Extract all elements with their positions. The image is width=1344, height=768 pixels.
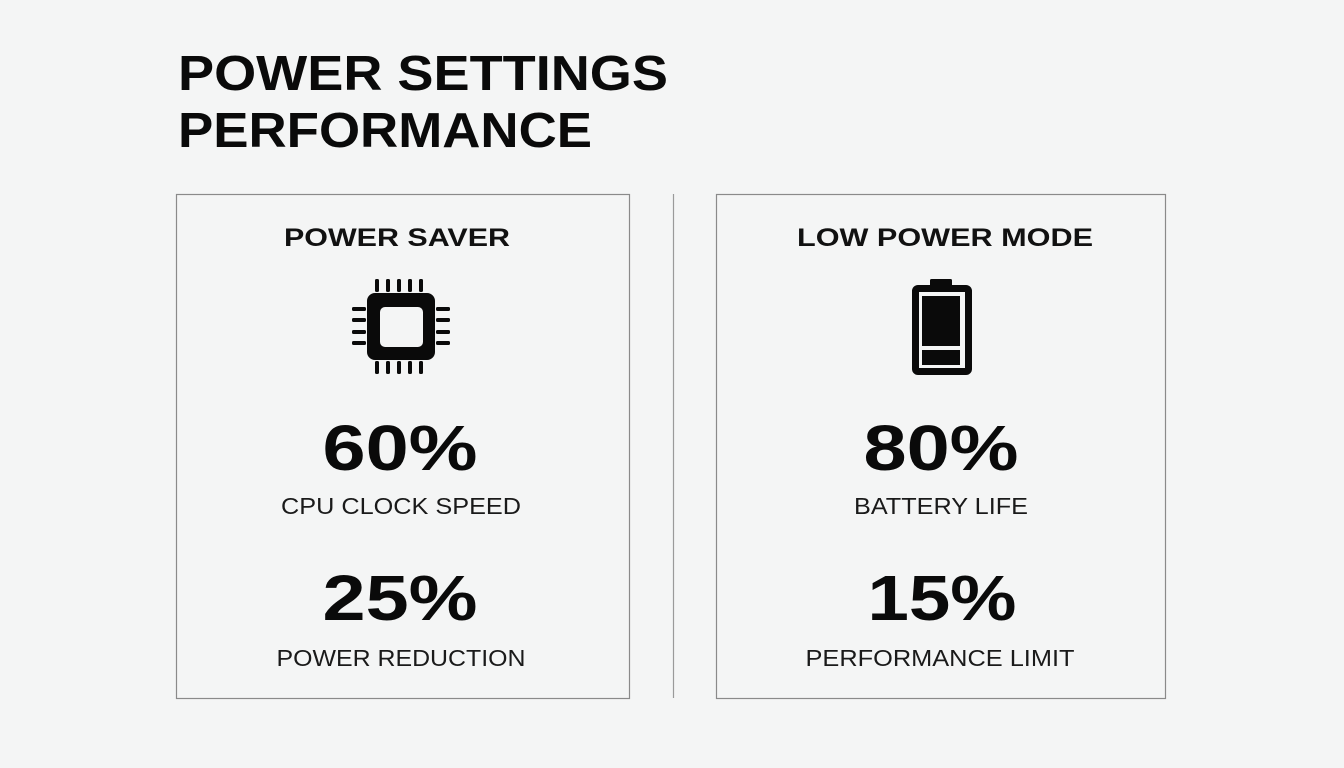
icon: battery (912, 279, 972, 375)
heading: low power mode: LOW POWER MODE (797, 224, 1093, 252)
panel: low power mode (716, 194, 1166, 698)
stat: 60% cpu clock speed: 60% (322, 412, 478, 484)
title (178, 47, 668, 158)
stat: 25% power reduction: POWER REDUCTION (276, 645, 526, 671)
stat: 80% battery life (854, 412, 1028, 519)
stat: 80% battery life: 80% (864, 412, 1018, 484)
panel: power saver (176, 194, 630, 698)
stat: 60% cpu clock speed (281, 412, 521, 519)
stat: 60% cpu clock speed: CPU CLOCK SPEED (281, 493, 521, 519)
icon: cpu chip (352, 279, 450, 374)
stat: 25% power reduction (276, 562, 526, 671)
stat: 25% power reduction: 25% (322, 562, 478, 634)
stat: 15% performance limit: PERFORMANCE LIMIT (806, 645, 1074, 671)
title: POWER SETTINGS (178, 47, 668, 101)
stat: 15% performance limit: 15% (868, 562, 1016, 634)
title: PERFORMANCE (178, 104, 592, 158)
stat: 80% battery life: BATTERY LIFE (854, 493, 1028, 519)
heading: power saver: POWER SAVER (284, 224, 510, 252)
stat: 15% performance limit (806, 562, 1074, 671)
